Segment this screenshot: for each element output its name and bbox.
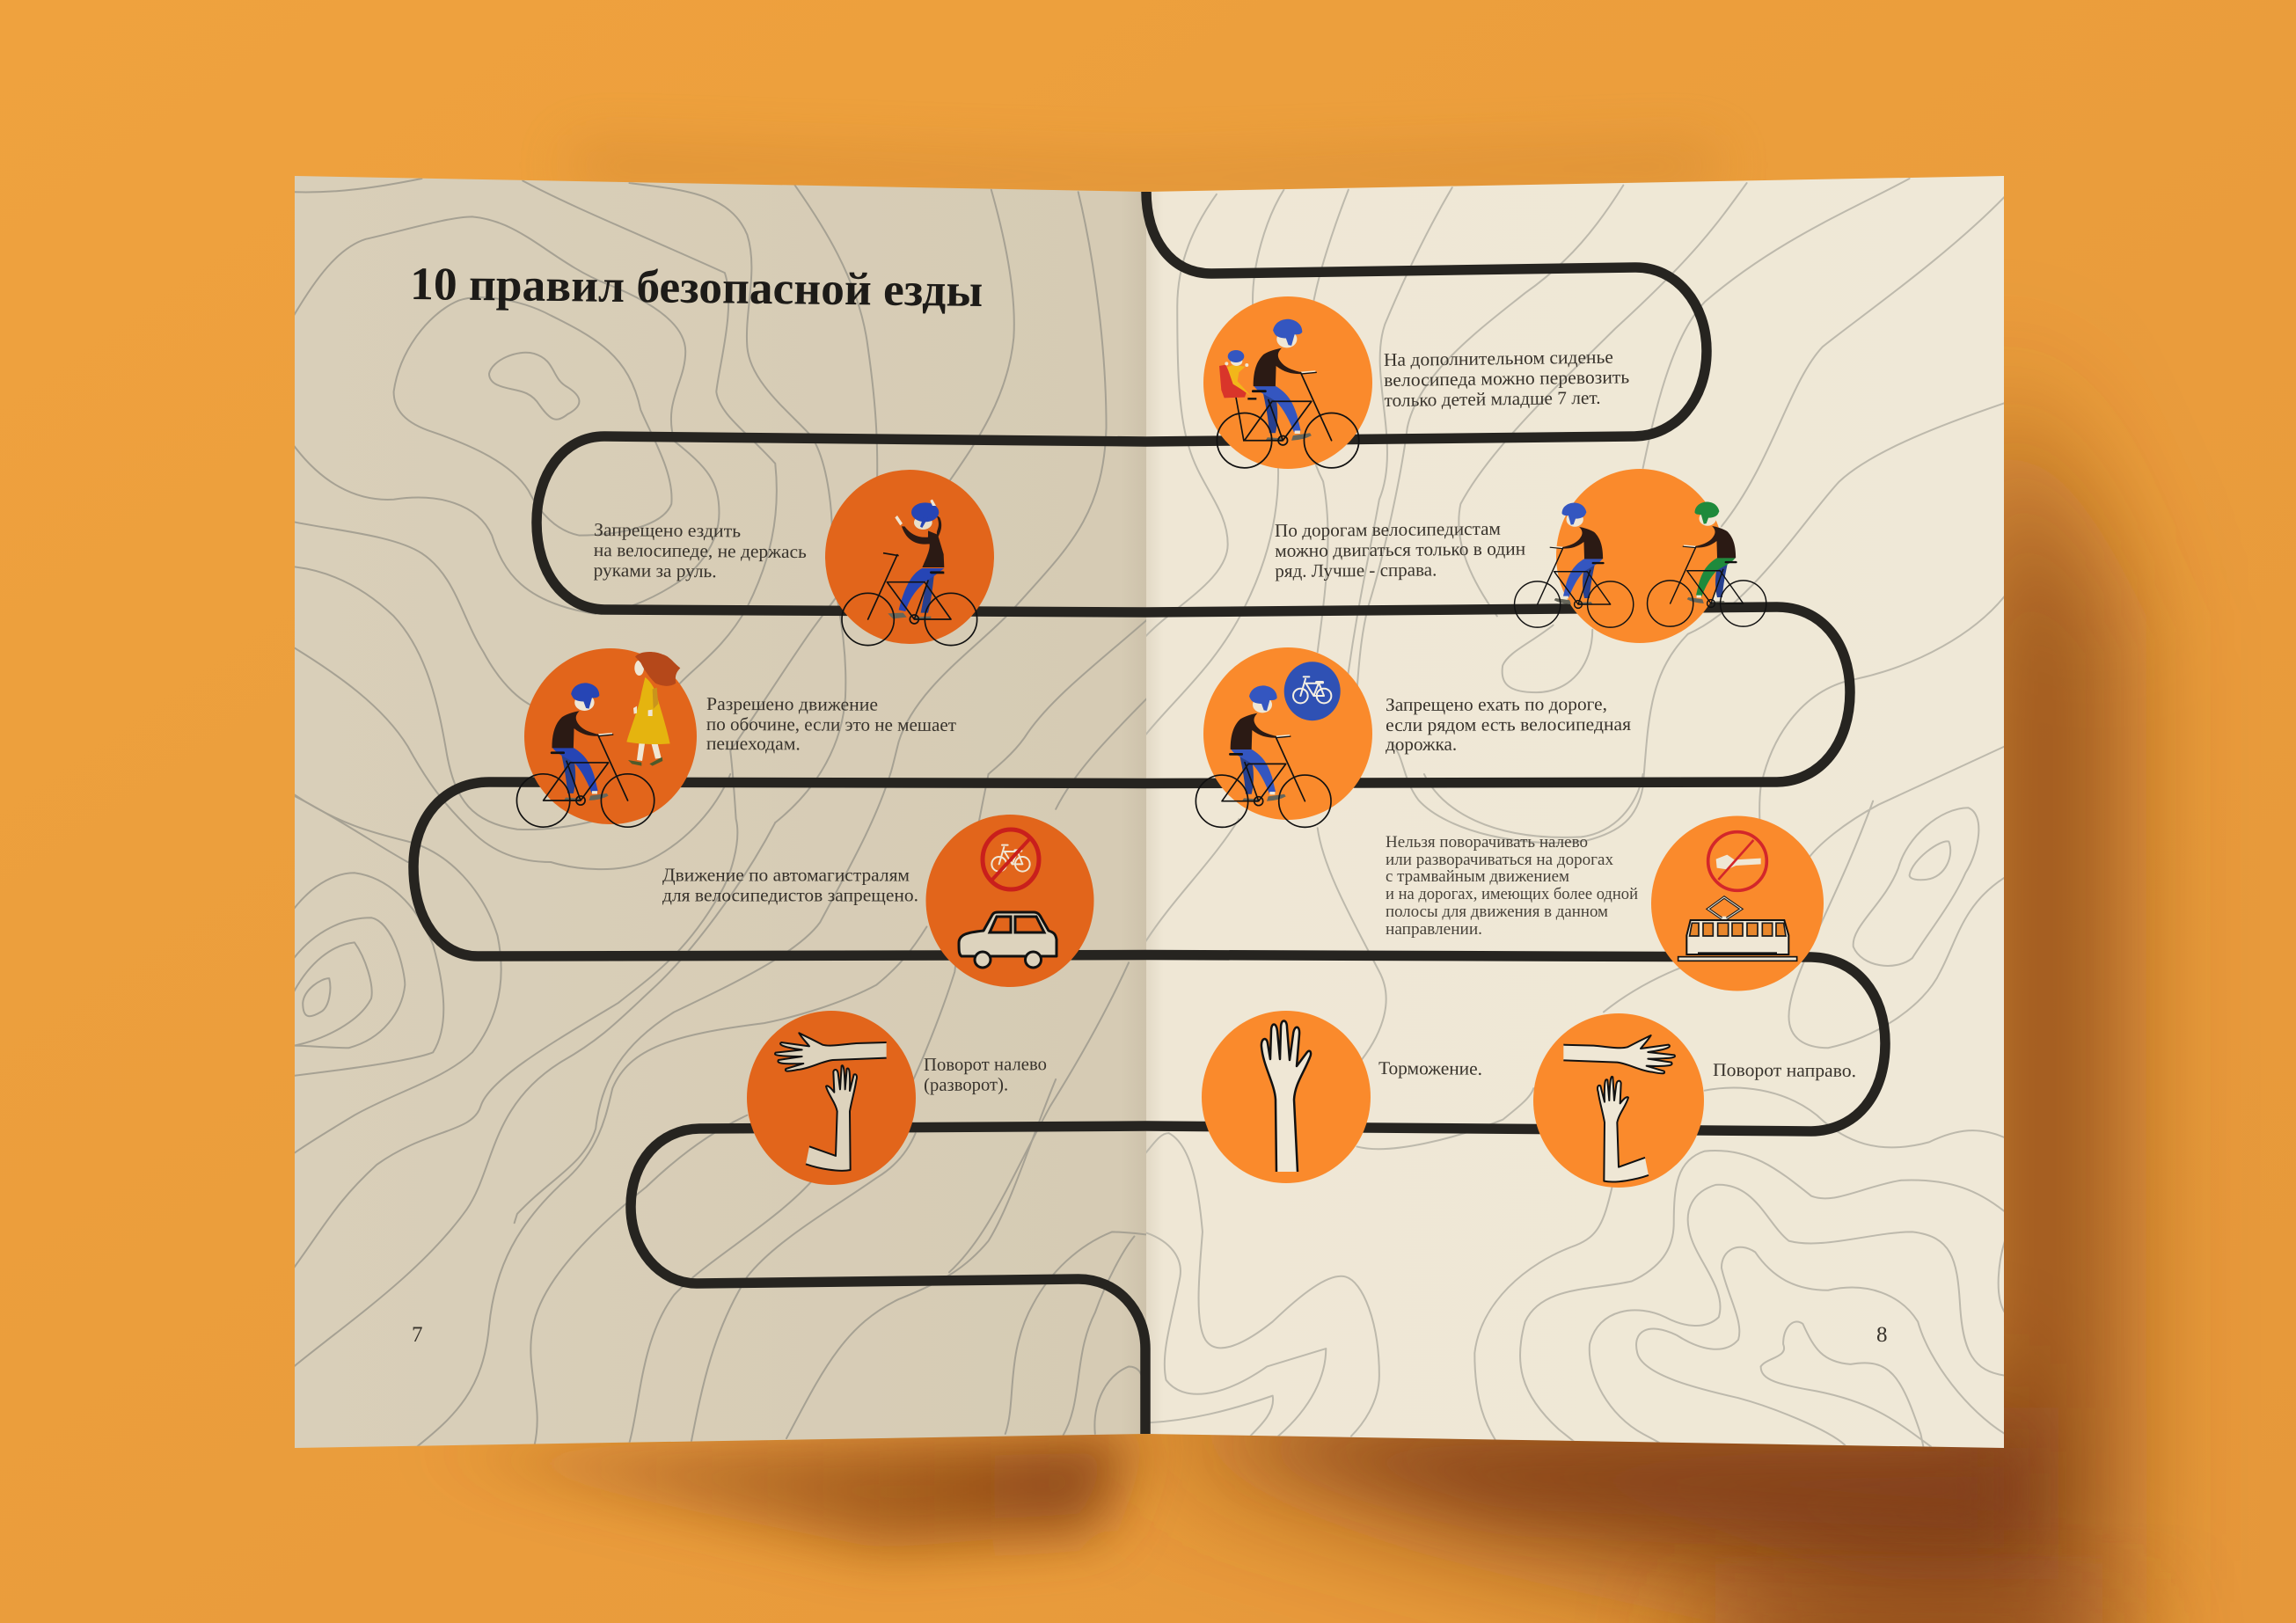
text: no left turn: направлении.	[1386, 921, 1482, 939]
signal: right turn	[1533, 1013, 1704, 1188]
title: 10 правил безопасной езды	[410, 259, 983, 317]
text: bicycle path	[1386, 693, 1632, 755]
text: no hands-free riding: руками за руль.	[594, 559, 717, 581]
text: no left turn: и на дорогах, имеющих более одной	[1386, 886, 1638, 903]
text: single file	[1275, 518, 1525, 581]
page number 8: 8	[1876, 1323, 1888, 1347]
text: child seat: На дополнительном сиденье	[1384, 347, 1613, 370]
text: single file: ряд. Лучше - справа.	[1275, 559, 1437, 581]
road path	[413, 192, 1885, 1434]
text: roadside riding	[706, 693, 956, 755]
text: single file: По дорогам велосипедистам	[1275, 518, 1501, 541]
rule: no hands-free riding	[825, 470, 994, 646]
text: braking: Торможение.	[1378, 1057, 1482, 1079]
rule: motorway forbidden	[925, 815, 1094, 987]
text: single file: можно двигаться только в один	[1275, 538, 1525, 561]
page number 7: 7	[412, 1323, 422, 1347]
rule: single file	[1515, 469, 1766, 643]
icon: no bicycle sign	[983, 830, 1039, 889]
text: bicycle path: дорожка.	[1386, 734, 1457, 755]
text: motorway forbidden: для велосипедистов запрещено.	[662, 885, 918, 906]
text: child seat: велосипеда можно перевозить	[1384, 366, 1629, 391]
text: bicycle path: если рядом есть велосипедная	[1386, 713, 1631, 735]
icon: child in seat	[1219, 350, 1256, 442]
text: left turn: Поворот налево	[924, 1053, 1047, 1075]
panel: left page	[295, 176, 1146, 1448]
text: no left turn: полосы для движения в данном	[1386, 903, 1608, 921]
icon: car	[959, 912, 1057, 968]
text: left turn: (разворот).	[924, 1073, 1008, 1095]
text: child seat	[1384, 346, 1630, 411]
text: no left turn: с трамвайным движением	[1386, 868, 1569, 886]
text: child seat: только детей младше 7 лет.	[1384, 387, 1601, 411]
text: no left turn: или разворачиваться на дорогах	[1386, 852, 1614, 869]
contour lines: right page	[1144, 179, 2005, 1447]
signal: braking	[1202, 1011, 1371, 1183]
text: no hands-free riding: Запрещено ездить	[594, 519, 741, 541]
text: motorway forbidden: Движение по автомагистралям	[662, 864, 910, 885]
signal: left turn	[747, 1011, 916, 1185]
page shadows	[422, 150, 2102, 1623]
text: left turn	[924, 1053, 1047, 1095]
text: no hands-free riding: на велосипеде, не держась	[594, 539, 807, 562]
rule: no left turn on tram roads	[1651, 816, 1824, 991]
contour lines: left page	[294, 179, 1161, 1447]
text: motorway forbidden	[662, 864, 918, 906]
text: bicycle path: Запрещено ехать по дороге,	[1386, 693, 1607, 715]
text: roadside riding: по обочине, если это не мешает	[706, 713, 956, 735]
text: no left turn	[1386, 834, 1638, 939]
rule: bicycle path	[1196, 647, 1372, 827]
rule: roadside riding with pedestrian	[516, 648, 697, 827]
rule: child seat	[1203, 296, 1372, 469]
text: no hands-free riding	[594, 519, 807, 582]
text: no left turn: Нельзя поворачивать налево	[1386, 834, 1588, 852]
icon: tram	[1678, 897, 1797, 961]
text: roadside riding: пешеходам.	[706, 733, 801, 754]
panel: right page	[1146, 176, 2004, 1448]
text: right turn: Поворот направо.	[1713, 1059, 1856, 1081]
text: roadside riding: Разрешено движение	[706, 693, 878, 715]
icon: no turn sign	[1708, 832, 1766, 890]
icon: blue bicycle sign	[1284, 662, 1341, 720]
